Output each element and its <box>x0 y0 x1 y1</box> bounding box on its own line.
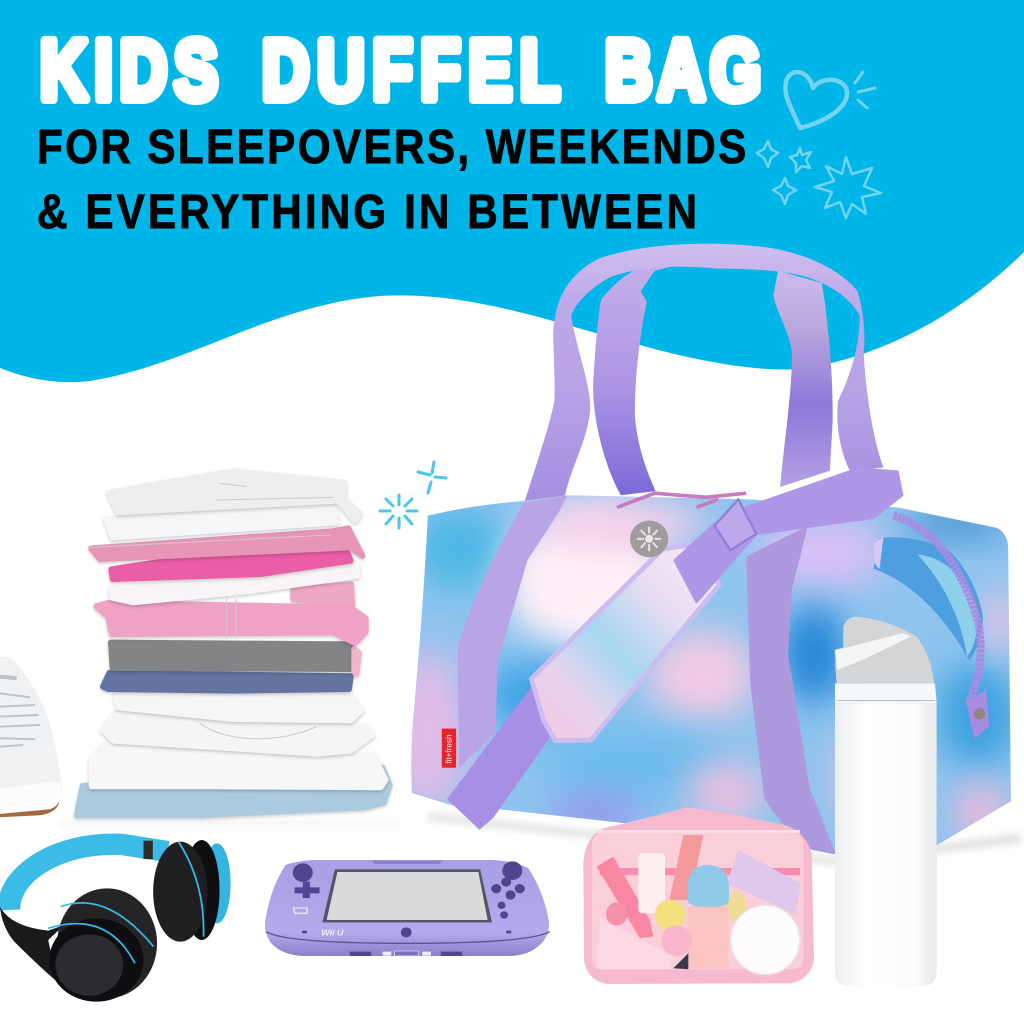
duffel bag: fit+fresh <box>445 734 454 764</box>
right ear cup <box>203 843 231 923</box>
toiletry pouch and water bottle <box>583 617 937 986</box>
right wide handle leg <box>773 271 833 487</box>
shoe and clothes stack <box>0 471 400 825</box>
subtitle: & EVERYTHING IN BETWEEN <box>37 184 697 239</box>
screen <box>322 869 492 922</box>
bottom piping <box>810 847 835 854</box>
water bottle <box>835 617 937 986</box>
left vertical strap <box>458 495 567 769</box>
shoulder pad <box>531 544 719 741</box>
floor shadow <box>60 822 400 825</box>
headphones <box>0 840 231 1002</box>
end pocket opening <box>874 537 983 660</box>
duffel bag <box>384 244 1024 871</box>
headband <box>9 844 168 910</box>
right vertical strap <box>746 526 836 854</box>
subtitle: FOR SLEEPOVERS, WEEKENDS <box>37 119 746 174</box>
icons: heart and stars <box>757 72 881 218</box>
subtitle <box>37 119 746 239</box>
title <box>40 23 761 117</box>
game console: Wii U <box>321 928 344 937</box>
controls <box>293 861 525 956</box>
pouch <box>583 807 814 984</box>
bag ground shadow <box>428 813 1021 865</box>
sparkles near bag <box>380 462 446 528</box>
strap buckle <box>714 499 756 550</box>
main handle <box>524 244 884 503</box>
clothes details <box>90 483 333 739</box>
shoulder strap lower <box>447 687 565 830</box>
red label <box>442 729 456 768</box>
top zipper pulls <box>617 493 746 507</box>
game console <box>265 860 550 956</box>
title: DUFFEL <box>262 23 560 117</box>
left ear cup <box>57 888 157 998</box>
title: KIDS <box>40 23 218 117</box>
title: BAG <box>605 23 761 117</box>
clothes layers <box>77 471 390 815</box>
shoulder strap upper <box>675 469 902 602</box>
side zipper <box>894 516 981 703</box>
logo badge <box>630 520 668 557</box>
blue wave header background <box>0 0 1024 382</box>
bag body <box>411 495 1011 854</box>
shoe <box>0 657 63 817</box>
back handle left leg <box>593 265 679 495</box>
